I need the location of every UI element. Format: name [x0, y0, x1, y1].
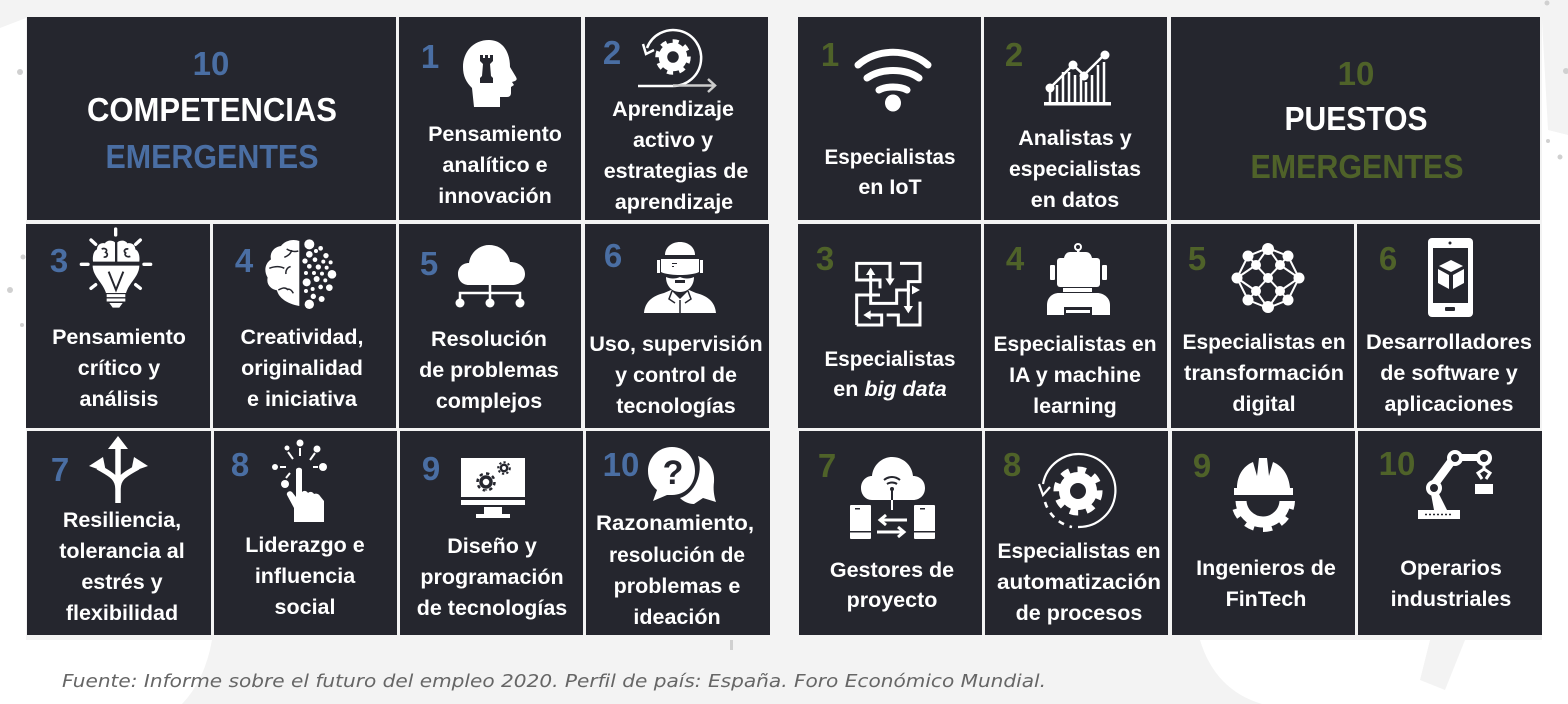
icon: gear with loop arrow: [638, 30, 715, 92]
panel: competencia 4: [213, 224, 396, 428]
panel: puestos header: [1171, 17, 1540, 220]
panel: competencia 6: 6: [604, 237, 622, 274]
panel: puesto 10: Operarios: [1400, 556, 1502, 580]
panel: competencia 10: problemas e: [614, 574, 740, 598]
panel: competencia 8: social: [275, 595, 335, 619]
panel: puesto 3: [798, 224, 981, 428]
panel: competencia 7: 7: [51, 451, 69, 488]
icon: line and bar chart: [1044, 50, 1111, 106]
panel: puestos header: 10: [1338, 55, 1374, 92]
panel: puesto 5: [1171, 224, 1354, 428]
panel: competencia 2: estrategias de: [604, 159, 748, 183]
icon: digital network sphere: [1232, 243, 1304, 313]
panel: puesto 8: automatización: [997, 570, 1161, 594]
panel: competencia 10: 10: [603, 446, 639, 483]
panel: competencia 6: [585, 224, 769, 428]
panel: competencia 7: tolerancia al: [59, 539, 185, 563]
panel: competencia 3: Pensamiento: [52, 325, 186, 349]
panel: competencia 4: originalidad: [241, 356, 363, 380]
icon: speech bubbles with question mark: ?: [663, 454, 683, 492]
icon: person with VR glasses: [644, 242, 716, 313]
panel: competencia 4: e iniciativa: [247, 387, 358, 411]
panel: competencia 5: Resolución: [431, 327, 547, 351]
panel: competencia 8: [214, 431, 397, 635]
panel: competencia 7: flexibilidad: [66, 601, 178, 625]
icon: robot: [1047, 244, 1110, 315]
panel: puesto 10: industriales: [1391, 587, 1511, 611]
panel: competencia 7: Resiliencia,: [63, 508, 181, 532]
panel: puesto 9: Ingenieros de: [1196, 556, 1336, 580]
panel: competencias header: [27, 17, 396, 220]
panel: puesto 8: 8: [1003, 446, 1021, 483]
icon: hand touching dots: [272, 440, 327, 522]
icon: cloud network: [456, 245, 525, 308]
panel: competencia 4: Creatividad,: [240, 325, 364, 349]
panel: competencia 6: Uso, supervisión: [589, 332, 763, 356]
panel: competencia 2: activo y: [633, 128, 713, 152]
source note: Fuente: Informe sobre el futuro del empleo 2020. Perfil de país: España. Foro Económico Mundial.: [62, 671, 1046, 692]
panel: puesto 4: IA y machine: [1009, 363, 1141, 387]
panel: puesto 10: 10: [1379, 445, 1415, 482]
panel: puesto 1: [798, 17, 981, 220]
panel: competencia 5: de problemas: [419, 358, 559, 382]
panel: competencia 3: [26, 224, 210, 428]
panel: puesto 1: en IoT: [858, 175, 922, 199]
icon: gear with circular arrow: [1039, 454, 1115, 527]
icon: head with chess rook: [463, 40, 517, 107]
panel: competencia 5: [399, 224, 581, 428]
icon: robot arm: [1418, 452, 1493, 519]
panel: puesto 6: aplicaciones: [1384, 392, 1514, 416]
panel: puesto 2: en datos: [1031, 188, 1119, 212]
panel: competencia 1: Pensamiento: [428, 122, 562, 146]
panel: competencia 4: 4: [235, 242, 254, 279]
panel: puesto 1: 1: [821, 36, 839, 73]
panel: puesto 7: 7: [818, 447, 836, 484]
panel: puesto 3: 3: [816, 240, 834, 277]
panel: competencia 2: [585, 17, 768, 220]
icon: maze with arrows: [857, 263, 920, 325]
panel: competencia 10: [586, 431, 770, 635]
icon: speech bubbles with question mark: [648, 447, 716, 504]
panel: competencia 8: Liderazgo e: [245, 533, 365, 557]
panel: puesto 3: Especialistas: [824, 347, 956, 371]
panel: competencia 9: [400, 431, 583, 635]
panel: puesto 2: Analistas y: [1018, 126, 1132, 150]
panel: competencia 9: de tecnologías: [417, 596, 567, 620]
panel: competencia 8: 8: [231, 446, 249, 483]
panel: competencia 3: crítico y: [78, 356, 160, 380]
panel: puesto 4: learning: [1033, 394, 1117, 418]
panel: competencia 3: 3: [50, 242, 68, 279]
panel: puesto 2: [984, 17, 1167, 220]
panel: puesto 6: de software y: [1380, 361, 1518, 385]
heading: emergentes: EMERGENTES: [1250, 148, 1464, 185]
panel: competencia 2: Aprendizaje: [612, 97, 734, 121]
panel: puesto 9: 9: [1193, 447, 1211, 484]
panel: puesto 7: [799, 431, 982, 635]
panel: competencia 1: [399, 17, 581, 220]
panel: competencia 6: tecnologías: [616, 394, 736, 418]
panel: puesto 4: Especialistas en: [994, 332, 1156, 356]
icon: helmet with gear: [1234, 458, 1293, 530]
panel: competencia 2: 2: [603, 34, 621, 71]
panel: puesto 2: 2: [1005, 36, 1023, 73]
icon: smartphone with cube: [1428, 238, 1473, 317]
heading: emergentes: EMERGENTES: [106, 138, 318, 175]
panel: competencia 6: y control de: [615, 363, 737, 387]
panel: puesto 5: transformación: [1184, 361, 1344, 385]
panel: competencia 1: 1: [421, 38, 439, 75]
panel: puesto 6: 6: [1379, 240, 1397, 277]
heading number: 10 competencias: 10: [193, 45, 229, 82]
icon: lightbulb with brain: [81, 229, 151, 308]
panel: puesto 8: [985, 431, 1168, 635]
panel: competencia 10: ideación: [633, 605, 721, 629]
panel: puesto 7: Gestores de: [830, 558, 954, 582]
panel: puesto 5: 5: [1188, 240, 1206, 277]
panel: competencia 9: Diseño y: [447, 534, 537, 558]
panel: competencia 2: aprendizaje: [615, 190, 733, 214]
panel: competencia 7: [27, 431, 211, 635]
icon: wifi: [858, 52, 928, 112]
icon: monitor with gears: [461, 458, 525, 518]
panel: puesto 1: Especialistas: [824, 145, 956, 169]
panel: competencia 10: resolución de: [609, 543, 745, 567]
panel: competencia 7: estrés y: [81, 570, 163, 594]
icon: three-way arrows: [89, 436, 148, 503]
panel: competencia 5: 5: [420, 245, 438, 282]
panel: puesto 3: en big data: [833, 377, 947, 401]
panel: competencia 9: programación: [420, 565, 564, 589]
panel: competencia 10: Razonamiento,: [596, 511, 754, 535]
panel: puesto 4: 4: [1006, 240, 1025, 277]
panel: puesto 7: proyecto: [847, 588, 937, 612]
panel: puesto 8: de procesos: [1016, 601, 1142, 625]
panel: puesto 6: Desarrolladores: [1366, 330, 1532, 354]
panel: puesto 10: [1358, 431, 1542, 635]
panel: puesto 5: Especialistas en: [1182, 330, 1346, 354]
panel: competencia 8: influencia: [255, 564, 356, 588]
icon: half brain half dots: [265, 239, 336, 309]
panel: competencia 9: 9: [422, 450, 440, 487]
icon: cloud with devices: [850, 457, 935, 539]
panel: competencia 1: innovación: [438, 184, 552, 208]
panel: puesto 5: digital: [1232, 392, 1296, 416]
heading: competencias: COMPETENCIAS: [87, 91, 337, 128]
panel: puesto 8: Especialistas en: [998, 539, 1160, 563]
panel: puesto 6: [1357, 224, 1540, 428]
panel: puesto 4: [984, 224, 1167, 428]
panel: competencia 1: analítico e: [442, 153, 548, 177]
panel: puesto 2: especialistas: [1009, 157, 1141, 181]
panel: competencia 5: complejos: [436, 389, 542, 413]
heading: puestos: PUESTOS: [1284, 100, 1428, 137]
panel: puesto 9: FinTech: [1226, 587, 1306, 611]
panel: competencia 3: análisis: [80, 387, 158, 411]
panel: puesto 9: [1172, 431, 1355, 635]
